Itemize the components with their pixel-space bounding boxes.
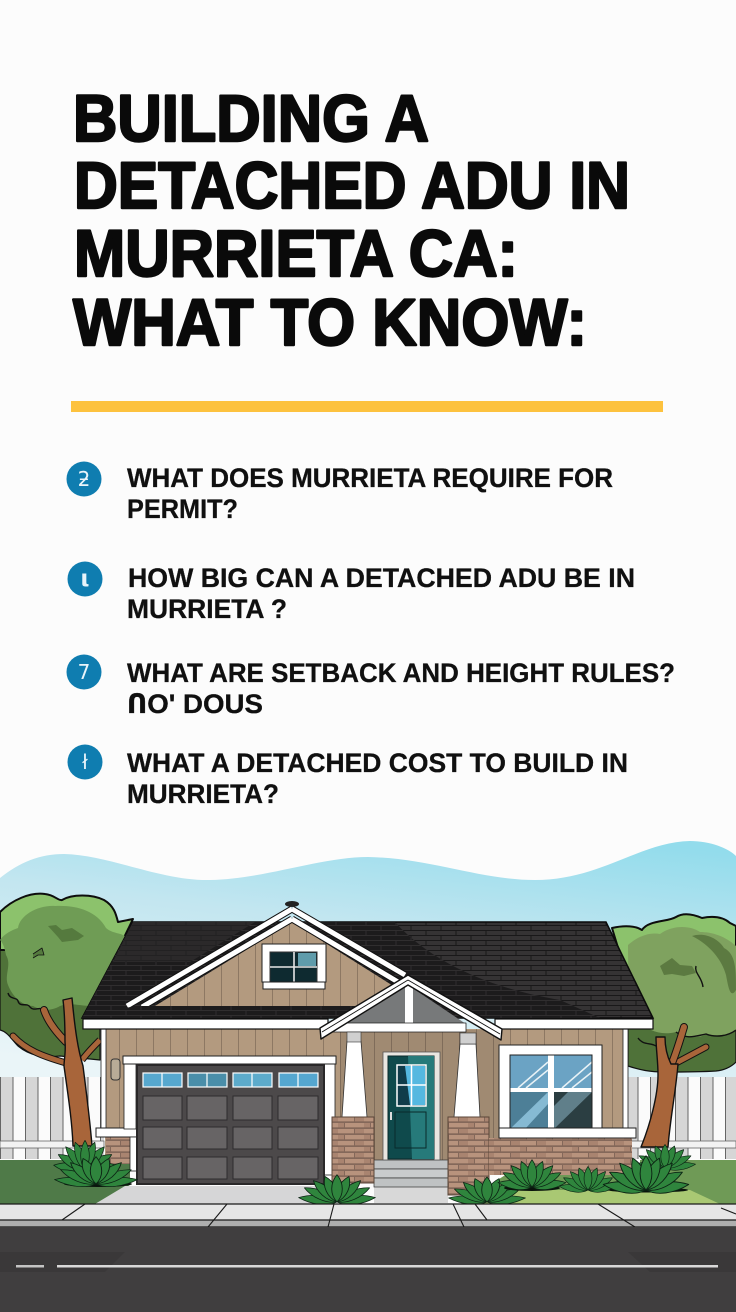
shrub: right rear <box>634 1144 696 1172</box>
question list <box>66 462 675 809</box>
wall lamp <box>111 1059 120 1080</box>
main gable <box>82 901 425 1018</box>
shrubs <box>53 1140 696 1206</box>
question 1 <box>66 462 613 524</box>
title: WHAT TO KNOW: <box>73 285 587 359</box>
question 3: WHAT ARE SETBACK AND HEIGHT RULES? <box>127 658 675 688</box>
fascia <box>83 1019 653 1029</box>
question 2 <box>68 562 635 624</box>
sidewalk <box>0 1204 736 1227</box>
question 4 <box>68 744 628 809</box>
question 4: ł <box>82 750 88 774</box>
shrub: right of walk <box>448 1177 526 1206</box>
steps <box>374 1160 448 1203</box>
question 4: WHAT A DETACHED COST TO BUILD IN <box>127 748 628 778</box>
title <box>73 81 630 359</box>
shrub: left rear <box>53 1140 117 1175</box>
title: MURRIETA CA: <box>74 216 518 290</box>
question 2: MURRIETA ? <box>127 594 287 624</box>
question 3: 7 <box>78 660 90 684</box>
shrub: garage side <box>298 1175 376 1206</box>
question 4: MURRIETA? <box>127 779 279 809</box>
shrub: brick two <box>559 1166 617 1194</box>
shrub: left front <box>54 1157 138 1188</box>
question 3 <box>66 654 675 719</box>
question 3: ՈO' DOUS <box>127 689 263 719</box>
walls <box>101 1029 628 1164</box>
shrub: right front <box>602 1156 690 1195</box>
sky <box>0 841 736 1100</box>
roof <box>82 922 653 1018</box>
title: DETACHED ADU IN <box>74 148 630 222</box>
house <box>82 901 653 1203</box>
road <box>0 1227 736 1312</box>
driveway <box>95 1186 330 1204</box>
right tree <box>612 914 736 1147</box>
title: BUILDING A <box>73 81 429 155</box>
question 1: WHAT DOES MURRIETA REQUIRE FOR <box>127 463 613 493</box>
left column <box>332 1032 374 1183</box>
fences <box>0 1077 736 1159</box>
porch gable <box>320 975 502 1040</box>
question 2: HOW BIG CAN A DETACHED ADU BE IN <box>128 563 635 593</box>
front door <box>383 1052 440 1160</box>
garage brick and trim <box>96 1056 336 1175</box>
question 1: ƻ <box>78 467 90 491</box>
divider bar <box>71 401 663 412</box>
gable window <box>262 944 326 989</box>
lawns <box>0 1160 736 1204</box>
question 2: ι <box>81 566 89 592</box>
shrub: brick one <box>497 1160 567 1191</box>
question 1: PERMIT? <box>127 494 238 524</box>
picture window <box>489 1045 636 1175</box>
garage door <box>137 1065 324 1184</box>
left tree <box>0 894 133 1146</box>
right column <box>448 1033 489 1195</box>
